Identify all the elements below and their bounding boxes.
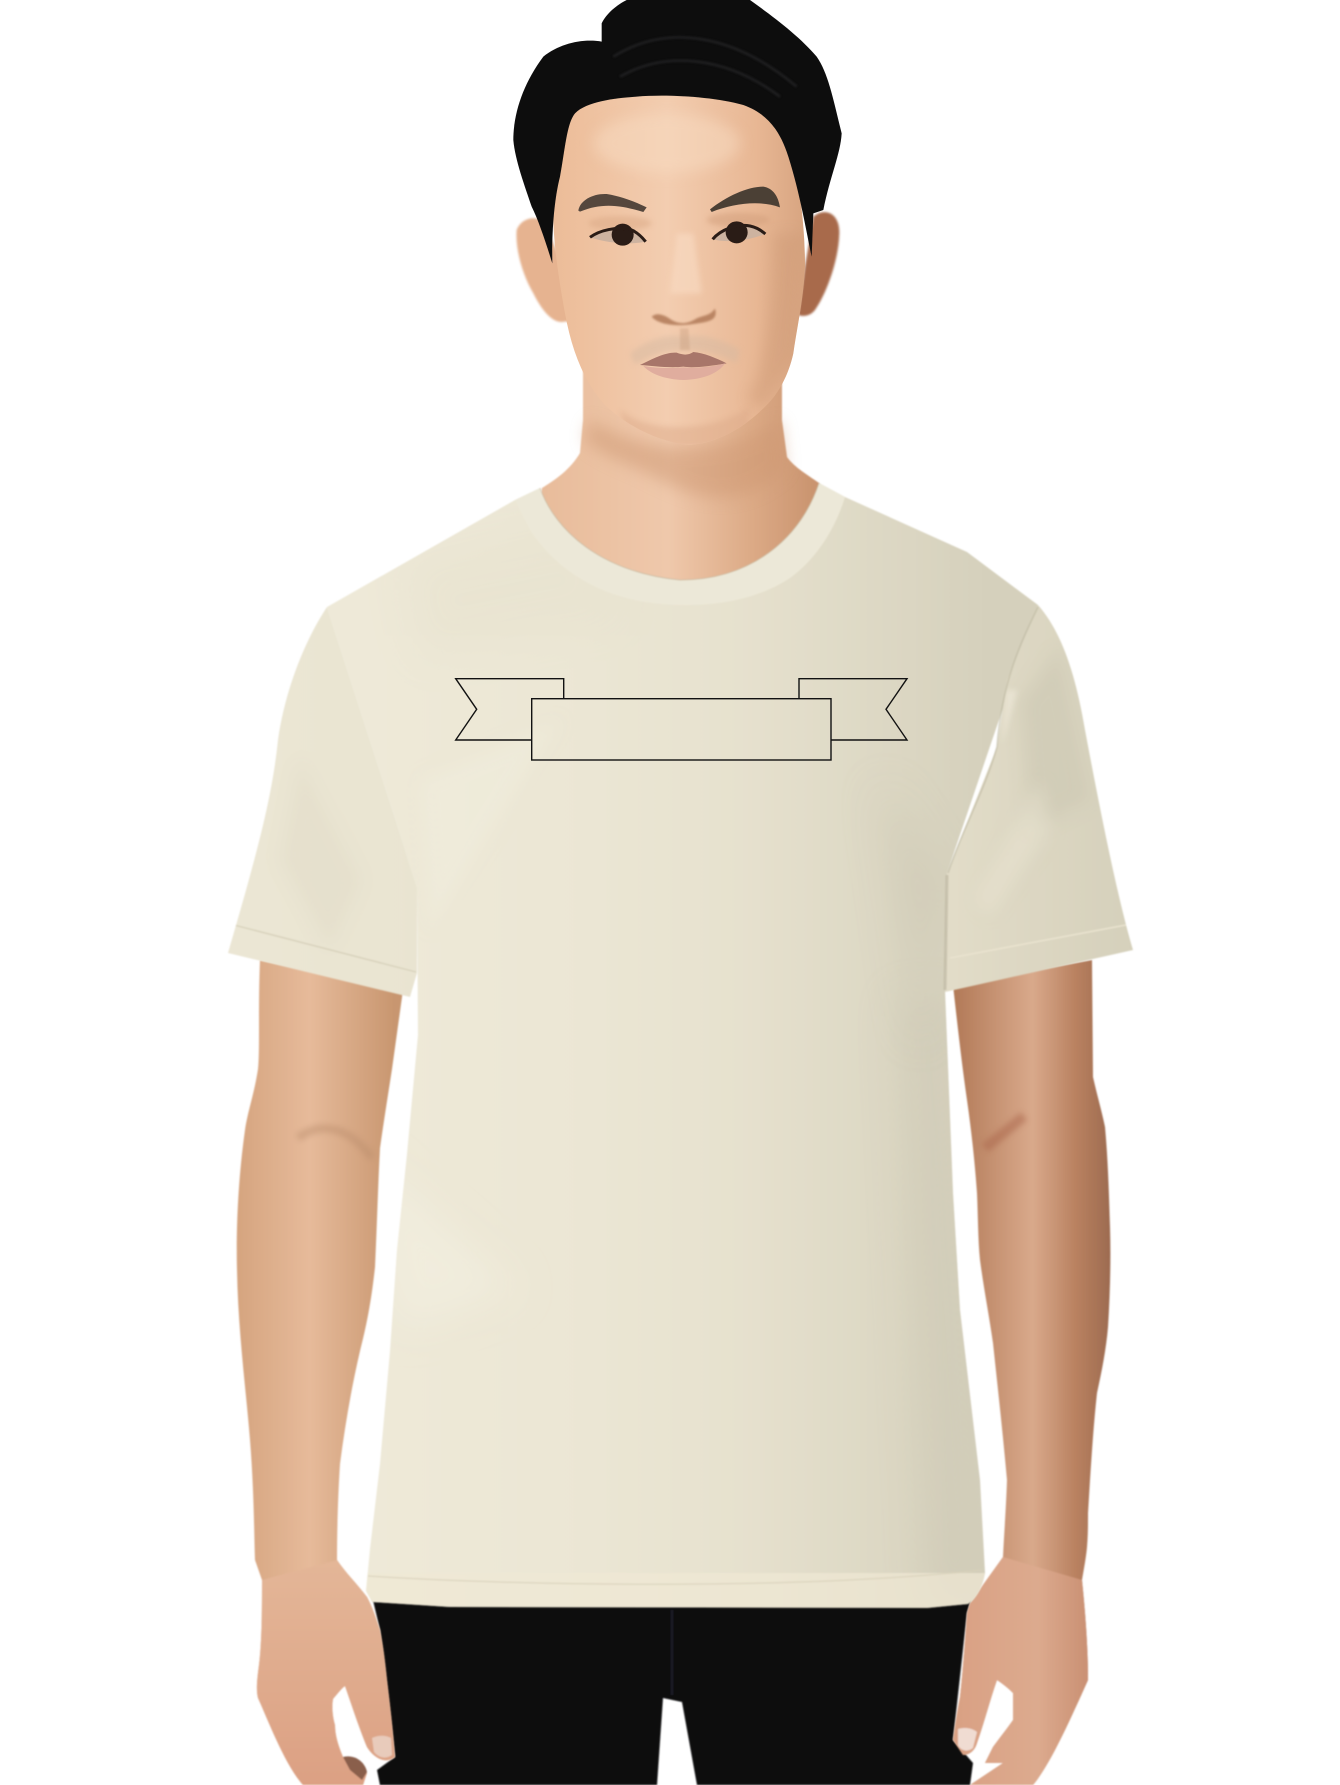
right sleeve — [945, 605, 1133, 992]
nose bridge highlight — [670, 233, 702, 293]
t-shirt — [228, 483, 1133, 1610]
right arm and hand — [953, 960, 1110, 1785]
hair sheen — [613, 37, 797, 97]
banner right tail — [799, 679, 907, 740]
illustration: man wearing cream t-shirt with ribbon banner — [228, 0, 1134, 1785]
nose — [652, 308, 716, 325]
t-shirt shading — [368, 686, 984, 1608]
left thumb nail — [372, 1736, 392, 1758]
left hand shading — [257, 1560, 395, 1785]
upper lip — [640, 352, 727, 367]
left finger tip — [343, 1756, 367, 1780]
neck opening shadow — [540, 483, 819, 580]
philtrum — [680, 328, 690, 350]
right eye — [713, 221, 765, 243]
left sleeve hem and folds — [236, 925, 416, 972]
lower lip — [643, 363, 725, 380]
forehead highlight — [596, 118, 740, 170]
collar — [515, 483, 845, 605]
banner centre panel — [532, 699, 831, 760]
ribbon banner — [456, 679, 907, 760]
t-shirt body — [327, 483, 1038, 1608]
elbow crease, left arm — [298, 1128, 372, 1158]
right sleeve hem and folds — [1005, 676, 1126, 947]
left eye socket shadow — [588, 216, 652, 231]
right sleeve seam — [948, 607, 1038, 873]
banner left tail — [456, 679, 564, 740]
left arm and hand — [237, 960, 403, 1785]
right eye socket shadow — [707, 213, 770, 227]
left eyebrow — [578, 194, 647, 212]
face shading — [593, 113, 805, 447]
face — [553, 95, 805, 445]
trouser fly seam — [671, 1610, 673, 1695]
hair — [513, 0, 842, 263]
left ear — [516, 218, 587, 322]
right ear — [798, 212, 839, 316]
left eye — [590, 224, 646, 246]
trousers — [372, 1596, 973, 1785]
neck shadow under chin — [585, 420, 785, 497]
face right shadow — [752, 240, 804, 402]
left sleeve — [228, 607, 417, 997]
right thumb nail — [958, 1728, 977, 1751]
head — [513, 0, 842, 447]
elbow crease, right arm — [985, 1116, 1024, 1148]
chin shadow — [622, 414, 745, 445]
neck — [540, 340, 825, 590]
stubble — [630, 336, 740, 365]
right hand shading — [953, 1557, 1088, 1785]
armpit shadow — [945, 875, 947, 990]
right eyebrow — [710, 187, 780, 212]
